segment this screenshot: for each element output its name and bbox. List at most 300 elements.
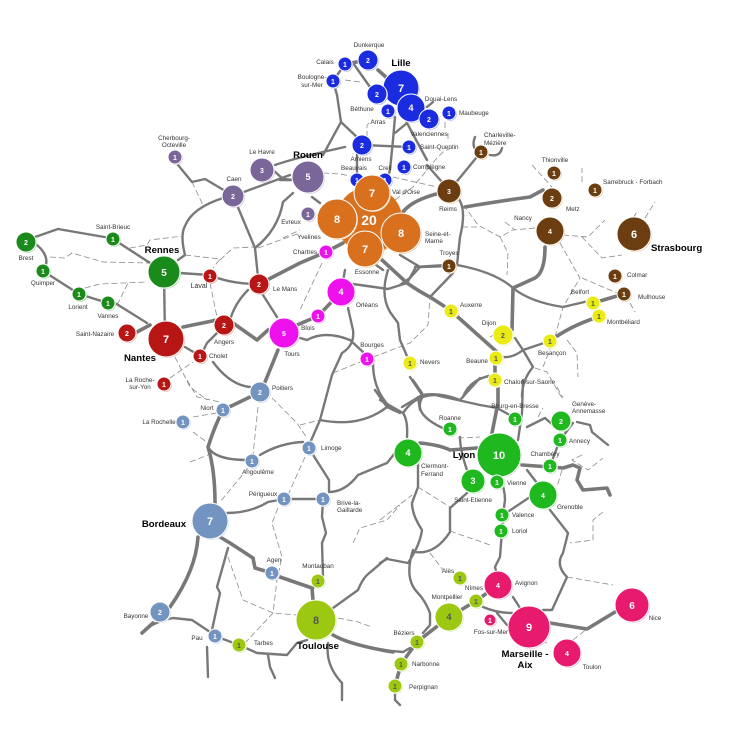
node: Vannes: 1 xyxy=(106,301,110,308)
node: Reims: Reims xyxy=(439,206,457,213)
node: Périgueux: 1 xyxy=(282,497,286,504)
node: Montpellier: Montpellier xyxy=(432,594,462,601)
node: Le Mans: 2 xyxy=(257,282,261,289)
node: Genève-Annemasse xyxy=(551,401,606,432)
node: Fos-sur-Mer xyxy=(474,614,508,636)
node: Agen: Agen xyxy=(267,557,282,564)
node: Douai-Lens: 4 xyxy=(408,103,414,113)
node: Saint-Etienne xyxy=(454,469,492,504)
node: Reims: 3 xyxy=(447,189,451,196)
node: Angoulême: Angoulême xyxy=(242,469,274,476)
node: Vienne: 1 xyxy=(495,480,499,487)
node: Rennes: 5 xyxy=(161,268,167,279)
node: Saint-Brieuc xyxy=(96,224,130,247)
node: Poitiers: Poitiers xyxy=(272,385,293,392)
node: Chambéry xyxy=(530,451,560,474)
node: Saint-Nazaire: 2 xyxy=(125,331,129,338)
node: Boulogne-sur-Mer xyxy=(298,74,341,89)
node: Clermont-Ferrand: Clermont- xyxy=(421,463,449,470)
node: Fos-sur-Mer: 1 xyxy=(488,618,492,625)
node: Douai-Lens xyxy=(397,94,457,123)
node: Valenciennes: 2 xyxy=(427,117,431,124)
node: Le Mans: Le Mans xyxy=(273,286,297,293)
node: Bourges: 1 xyxy=(365,357,369,364)
node: Creil: Creil xyxy=(379,165,391,172)
node: Valenciennes xyxy=(410,109,448,138)
node: Evreux: Evreux xyxy=(281,219,302,226)
node: Cherbourg-Octeville: Octeville xyxy=(162,142,187,149)
node: Seine-et-Marne xyxy=(381,213,451,254)
node: Maubeuge: Maubeuge xyxy=(459,110,489,117)
node: Lille: 7 xyxy=(398,83,404,95)
node: Quimper: 1 xyxy=(41,269,45,276)
node: Tours xyxy=(269,318,300,358)
node: Chambéry: Chambéry xyxy=(530,451,560,458)
node: Chambéry: 1 xyxy=(548,464,552,471)
node: Toulouse: 8 xyxy=(313,615,319,627)
node: Besançon: 1 xyxy=(548,339,552,346)
node: Béthune 1: 1 xyxy=(386,109,390,116)
node: Vienne: Vienne xyxy=(507,480,527,487)
node: Creil xyxy=(378,165,393,188)
node: Montauban: 1 xyxy=(316,579,320,586)
node: Yvelines: Yvelines xyxy=(297,234,321,241)
node: Chartres: 1 xyxy=(324,250,328,257)
node: Beaune: Beaune xyxy=(466,358,488,365)
node: Seine-et-Marne: 8 xyxy=(398,228,404,240)
node: Nice xyxy=(615,588,662,623)
node: Dijon xyxy=(482,320,514,346)
node: Pau xyxy=(191,629,223,644)
node: Toulouse xyxy=(296,600,339,652)
node: Montbéliard: Montbéliard xyxy=(607,319,640,326)
node: Valenciennes: Valenciennes xyxy=(410,131,448,138)
node: Montbéliard xyxy=(592,309,640,326)
node: Charleville-Mézière xyxy=(474,132,516,160)
node: Toulon xyxy=(553,639,602,671)
node: Avignon: Avignon xyxy=(515,580,538,587)
node: Annecy: 1 xyxy=(558,438,562,445)
node: Béziers xyxy=(394,630,425,650)
node: Reims xyxy=(437,179,462,213)
node: Perpignan: Perpignan xyxy=(409,684,438,691)
node: Valence: Valence xyxy=(512,512,535,519)
node: Dunkerque xyxy=(354,42,385,71)
node: Calais xyxy=(316,57,353,72)
node: Lyon xyxy=(453,433,522,478)
node: Périgueux: Périgueux xyxy=(249,491,278,498)
node: Saint-Etienne: Saint-Etienne xyxy=(454,497,492,504)
node: Auxerre xyxy=(444,302,483,319)
node: Orléans xyxy=(327,278,378,309)
node: Agen: 1 xyxy=(270,571,274,578)
node: Angers: Angers xyxy=(214,339,234,346)
node: Marseille - Aix: 9 xyxy=(526,622,532,634)
node: Charleville-Mézière: Mézière xyxy=(484,140,507,147)
node: Paris: Val d'Oise xyxy=(392,189,421,196)
node: Essonne xyxy=(347,231,384,276)
node: Perpignan: 1 xyxy=(393,684,397,691)
node: Troyes xyxy=(439,250,459,274)
node: Tours: 5 xyxy=(282,331,286,338)
node: Fos-sur-Mer: Fos-sur-Mer xyxy=(474,629,508,636)
node: Troyes: 1 xyxy=(447,264,451,271)
node: Compiègne: 1 xyxy=(402,165,406,172)
node: Grenoble: Grenoble xyxy=(557,504,583,511)
node: Vannes: Vannes xyxy=(98,313,118,320)
node: Strasbourg: Strasbourg xyxy=(651,243,702,254)
node: Cherbourg-Octeville: Cherbourg- xyxy=(158,135,190,142)
node: Compiègne: Compiègne xyxy=(413,164,446,171)
node: Belfort: 1 xyxy=(591,301,595,308)
node: Béthune xyxy=(367,84,388,105)
node: La Rochelle xyxy=(142,415,191,430)
node: Chartres xyxy=(293,245,334,260)
node: Cherbourg-Octeville xyxy=(158,135,190,165)
node: Montpellier: 4 xyxy=(446,612,452,622)
node: Evreux xyxy=(281,207,316,226)
node: Le Havre: Le Havre xyxy=(249,149,275,156)
node: Toulon: Toulon xyxy=(583,664,602,671)
node: Loriol xyxy=(494,524,527,539)
node: Bourges: Bourges xyxy=(360,342,384,349)
node: Brest xyxy=(16,232,37,262)
node: Nevers: Nevers xyxy=(420,359,440,366)
node: Orléans: Orléans xyxy=(356,302,378,309)
node: Rennes xyxy=(145,245,181,289)
node: Lyon: 10 xyxy=(493,450,505,462)
node: Belfort: Belfort xyxy=(571,289,589,296)
node: Essonne: 7 xyxy=(362,244,368,256)
node: Pau: Pau xyxy=(191,635,203,642)
node: Beaune: 1 xyxy=(494,356,498,363)
node: Angoulême xyxy=(242,454,274,476)
node: Agen xyxy=(265,557,282,581)
node: Chalon-sur-Saone: 1 xyxy=(493,378,497,385)
node: Laval: 1 xyxy=(208,274,212,281)
node: Rouen: Rouen xyxy=(293,150,323,161)
node: Brive-la-Gaillarde xyxy=(316,492,363,514)
node: Nancy: 4 xyxy=(548,229,552,236)
node: Saint-Quentin xyxy=(402,140,459,155)
node: Nice: 6 xyxy=(629,601,635,612)
node: Alès: Alès xyxy=(442,568,454,575)
node: Lille: Lille xyxy=(391,58,411,69)
node: Nantes xyxy=(124,321,185,364)
node: Tours: Tours xyxy=(284,351,300,358)
node: Annecy: Annecy xyxy=(569,438,591,445)
node: Brive-la-Gaillarde: Gaillarde xyxy=(337,507,363,514)
node: Laval: Laval xyxy=(191,283,208,290)
node: Charleville-Mézière: Charleville- xyxy=(484,132,516,139)
node: Nevers: 1 xyxy=(408,361,412,368)
node: Besançon: Besançon xyxy=(538,350,566,357)
label: Paris 20: 20 xyxy=(361,212,377,228)
node: Montbéliard: 1 xyxy=(597,314,601,321)
node: Vienne xyxy=(490,475,527,490)
node: Caen xyxy=(222,176,245,208)
node: Dijon: 2 xyxy=(501,333,505,340)
node: Périgueux xyxy=(249,491,292,507)
node: Saint-Quentin: 1 xyxy=(407,145,411,152)
node: Seine-et-Marne: Marne xyxy=(425,238,443,245)
node: Nîmes xyxy=(465,585,484,609)
node: Brest: Brest xyxy=(19,255,34,262)
node: Boulogne-sur-Mer: sur-Mer xyxy=(301,82,323,89)
node: Valence: 1 xyxy=(500,513,504,520)
node: Saint-Brieuc: Saint-Brieuc xyxy=(96,224,130,231)
node: La Roche-sur-Yon: 1 xyxy=(162,382,166,389)
node: Loriol: Loriol xyxy=(512,528,527,535)
node: Besançon xyxy=(538,334,566,357)
node: Montauban xyxy=(302,563,334,589)
node: Mulhouse: Mulhouse xyxy=(638,294,666,301)
node: Maubeuge: 1 xyxy=(447,111,451,118)
node: Saint-Brieuc: 1 xyxy=(111,237,115,244)
node: Genève-Annemasse: Genève- xyxy=(572,401,596,408)
node: Saint-Nazaire xyxy=(76,324,137,343)
node: Avignon: 4 xyxy=(496,583,500,590)
node: Alès xyxy=(442,568,468,586)
node: Cholet: Cholet xyxy=(209,353,227,360)
node: Beauvais xyxy=(341,165,367,188)
node: Val d'Oise: 7 xyxy=(369,188,375,200)
node: Angers: 2 xyxy=(222,323,226,330)
node: Limoge xyxy=(302,441,342,456)
node: Narbonne: Narbonne xyxy=(412,661,440,668)
node: Cherbourg-Octeville: 1 xyxy=(173,155,177,162)
node: Quimper: Quimper xyxy=(31,280,55,287)
node: Angoulême: 1 xyxy=(250,459,254,466)
node: Bordeaux: 7 xyxy=(207,516,213,528)
node: Sarrebruck - Forbach xyxy=(588,179,663,198)
node: La Rochelle: 1 xyxy=(181,420,185,427)
node: Caen: Caen xyxy=(226,176,242,183)
node: Narbonne: 1 xyxy=(399,662,403,669)
node: Lille xyxy=(383,58,420,107)
node: Genève-Annemasse: 2 xyxy=(559,419,563,426)
node: Lyon: Lyon xyxy=(453,450,475,461)
node: Le Havre xyxy=(249,149,275,183)
node: La Rochelle: La Rochelle xyxy=(142,419,176,426)
node: Thionville: 1 xyxy=(552,171,556,178)
node: Strasbourg: 6 xyxy=(631,229,637,241)
node: Toulouse: Toulouse xyxy=(297,641,339,652)
node: Val d'Oise xyxy=(354,175,391,212)
node: Marseille - Aix xyxy=(502,606,551,671)
node: Blois: Blois xyxy=(301,325,315,332)
node: Poitiers xyxy=(250,382,293,403)
node: Quimper xyxy=(31,264,55,287)
node: Dunkerque: Dunkerque xyxy=(354,42,385,49)
node: Nevers xyxy=(403,356,440,371)
node: Beauvais: 1 xyxy=(355,178,359,185)
node: Amiens: 2 xyxy=(360,143,364,150)
node: La Roche-sur-Yon: La Roche- xyxy=(125,377,155,384)
node: Rennes: Rennes xyxy=(145,245,179,256)
node: Niort: Niort xyxy=(200,405,214,412)
node: Pau: 1 xyxy=(213,634,217,641)
node: Genève-Annemasse: Annemasse xyxy=(572,408,606,415)
node: Blois xyxy=(301,309,326,332)
node: Boulogne-sur-Mer: 1 xyxy=(331,79,335,86)
node: Amiens xyxy=(350,135,373,163)
node: Toulon: 4 xyxy=(565,651,569,658)
node: Bourg-en-Bresse: Bourg-en-Bresse xyxy=(491,403,539,410)
node: Bayonne xyxy=(124,602,171,623)
node: Limoge: 1 xyxy=(307,446,311,453)
node: Lorient: 1 xyxy=(77,292,81,299)
node: Sarrebruck - Forbach: Sarrebruck - Forbach xyxy=(603,179,663,186)
node: Clermont-Ferrand: Ferrand xyxy=(421,471,444,478)
node: Tarbes xyxy=(232,638,273,653)
node: Chartres: Chartres xyxy=(293,249,317,256)
node: Grenoble: 4 xyxy=(541,493,545,500)
node: Sarrebruck - Forbach: 1 xyxy=(593,188,597,195)
node: Marseille - Aix: Aix xyxy=(518,660,533,671)
node: Montpellier xyxy=(432,594,464,632)
node: Roanne: Roanne xyxy=(439,415,462,422)
node: Metz: 2 xyxy=(550,196,554,203)
node: Chalon-sur-Saone xyxy=(488,373,556,388)
node: Thionville xyxy=(542,157,569,181)
node: Calais: Calais xyxy=(316,59,334,66)
node: Metz xyxy=(542,188,580,213)
node: Colmar: 1 xyxy=(613,274,617,281)
node: Poitiers: 2 xyxy=(258,390,262,397)
node: Marseille - Aix: Marseille - xyxy=(502,649,548,660)
node: Mulhouse: 1 xyxy=(622,292,626,299)
node: Nice: Nice xyxy=(649,615,662,622)
node: Saint-Quentin: Saint-Quentin xyxy=(420,144,459,151)
node: Cholet xyxy=(193,349,227,364)
node: Grenoble xyxy=(529,481,583,511)
node: Bourg-en-Bresse: 1 xyxy=(513,417,517,424)
node: Brive-la-Gaillarde: 1 xyxy=(321,497,325,504)
node: Saint-Nazaire: Saint-Nazaire xyxy=(76,331,115,338)
node: Mulhouse xyxy=(617,287,666,302)
node: Narbonne xyxy=(394,657,440,672)
node: Rouen xyxy=(292,150,325,194)
node: Limoge: Limoge xyxy=(321,445,342,452)
node: Belfort xyxy=(571,289,601,311)
node: Maubeuge xyxy=(442,106,489,121)
node: Béziers: Béziers xyxy=(394,630,414,637)
node: Arras: Arras xyxy=(370,119,386,126)
node: Vannes xyxy=(98,296,118,320)
node: Boulogne-sur-Mer: Boulogne- xyxy=(298,74,326,81)
node: Nancy: Nancy xyxy=(514,215,533,222)
node: Seine-et-Marne: Seine-et- xyxy=(425,231,451,238)
node: Nîmes: Nîmes xyxy=(465,585,483,592)
node: Bordeaux xyxy=(142,503,229,540)
node: Béthune 1 xyxy=(350,104,396,119)
node: Chalon-sur-Saone: Chalon-sur-Saone xyxy=(504,379,556,386)
node: Nancy xyxy=(514,215,565,246)
node: Metz: Metz xyxy=(566,206,580,213)
node: Perpignan xyxy=(388,679,438,694)
node: Avignon xyxy=(484,571,538,600)
node: Alès: 1 xyxy=(458,576,462,583)
node: Bayonne: 2 xyxy=(158,610,162,617)
node: Laval xyxy=(191,269,218,290)
node: Dunkerque: 2 xyxy=(366,58,370,65)
node: Niort xyxy=(200,403,231,418)
node: Clermont-Ferrand xyxy=(394,439,449,478)
node: Roanne xyxy=(439,415,462,437)
node: Bourg-en-Bresse xyxy=(491,403,539,427)
node: Essonne: Essonne xyxy=(355,269,380,276)
node: Roanne: 1 xyxy=(448,427,452,434)
node: La Roche-sur-Yon: sur-Yon xyxy=(129,384,151,391)
node: Charleville-Mézière: 1 xyxy=(479,150,483,157)
node: Dijon: Dijon xyxy=(482,320,497,327)
node: Valence xyxy=(495,508,535,523)
node: Bayonne: Bayonne xyxy=(124,613,149,620)
node: Brest: 2 xyxy=(24,240,28,247)
node: Béthune: 2 xyxy=(375,92,379,99)
dashed links xyxy=(50,80,655,643)
node: Blois: 1 xyxy=(316,314,320,321)
node: Troyes: Troyes xyxy=(439,250,459,257)
node: Bourges xyxy=(360,342,384,367)
node: La Roche-sur-Yon xyxy=(125,377,172,392)
node: Yvelines xyxy=(297,199,358,241)
node: Caen: 2 xyxy=(231,194,235,201)
node: Tarbes: Tarbes xyxy=(254,640,273,647)
node: Rouen: 5 xyxy=(305,172,311,182)
node: Douai-Lens: Douai-Lens xyxy=(425,96,457,103)
node: Creil: 1 xyxy=(383,178,387,185)
node: Montauban: Montauban xyxy=(302,563,334,570)
node: Paris xyxy=(336,187,421,254)
node: Angers xyxy=(214,315,235,346)
node: Nîmes: 1 xyxy=(474,599,478,606)
node: Saint-Etienne: 3 xyxy=(470,476,476,486)
node: Clermont-Ferrand: 4 xyxy=(405,448,411,458)
node: Nantes: Nantes xyxy=(124,353,156,364)
node: Colmar: Colmar xyxy=(627,272,647,279)
node: Béziers: 1 xyxy=(415,640,419,647)
node: Nantes: 7 xyxy=(163,334,169,346)
node: Niort: 1 xyxy=(221,408,225,415)
node: Lorient xyxy=(68,287,88,311)
node: Calais: 1 xyxy=(343,62,347,69)
node: Lorient: Lorient xyxy=(68,304,88,311)
node: Auxerre: 1 xyxy=(449,309,453,316)
node: Compiègne xyxy=(397,160,446,175)
node: Amiens: Amiens xyxy=(350,156,372,163)
node: Strasbourg xyxy=(617,217,702,254)
node: Orléans: 4 xyxy=(338,287,344,297)
node: Auxerre: Auxerre xyxy=(460,302,483,309)
node: Annecy xyxy=(553,433,591,448)
node: Tarbes: 1 xyxy=(237,643,241,650)
node: Beauvais: Beauvais xyxy=(341,165,367,172)
node: Yvelines: 8 xyxy=(334,214,340,226)
node: Cholet: 1 xyxy=(198,354,202,361)
node: Le Mans xyxy=(249,274,297,295)
road network xyxy=(35,60,624,705)
node: Evreux: 1 xyxy=(306,212,310,219)
node: Béthune 1: Béthune xyxy=(350,106,374,113)
node: Bordeaux: Bordeaux xyxy=(142,519,187,530)
node: Beaune xyxy=(466,351,504,366)
node: Thionville: Thionville xyxy=(542,157,569,164)
node: Brive-la-Gaillarde: Brive-la- xyxy=(337,500,360,507)
node: Loriol: 1 xyxy=(499,529,503,536)
node: Le Havre: 3 xyxy=(260,168,264,175)
